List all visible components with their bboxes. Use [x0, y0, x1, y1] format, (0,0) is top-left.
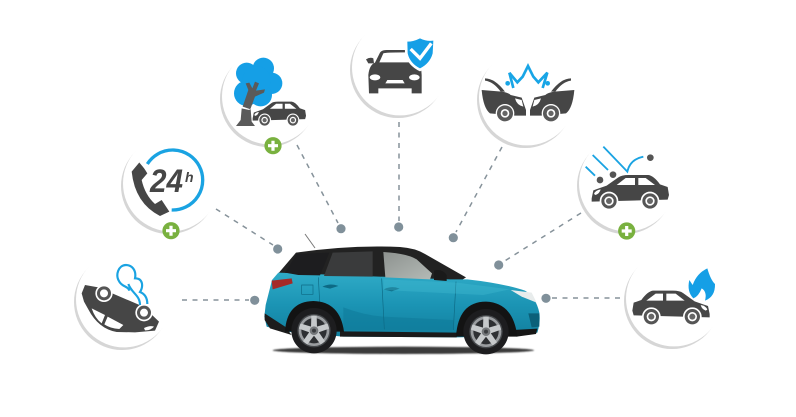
- icon: head-on collision: [482, 66, 574, 123]
- circle: [74, 251, 172, 350]
- car shadow: [273, 347, 534, 354]
- front bumper trim: [513, 329, 537, 337]
- fog lamp: [528, 313, 539, 327]
- headlight: [511, 290, 537, 303]
- plus badge: [162, 222, 180, 239]
- connector: overturned car: [182, 296, 259, 305]
- icon circle: protection: [350, 19, 448, 118]
- front wheel: [463, 309, 509, 354]
- circle: [477, 49, 575, 148]
- icon: tree falling on car: [234, 58, 306, 127]
- icon: car on fire: [632, 268, 715, 326]
- door seams and handles: [302, 277, 456, 330]
- icon circle: 24h assistance: [121, 135, 219, 239]
- plus badge: [618, 222, 635, 240]
- main teal SUV: [264, 234, 540, 354]
- circle: [577, 135, 675, 234]
- rear door window: [324, 251, 373, 277]
- circle: [350, 19, 448, 118]
- icon: overturned car with smoke: [82, 265, 159, 332]
- plus badge: [264, 137, 282, 154]
- icon circle: collision: [477, 49, 575, 148]
- car body: [264, 273, 540, 337]
- connector: fire: [541, 294, 622, 303]
- antenna: [305, 234, 315, 248]
- rear bumper trim: [265, 313, 292, 335]
- connector: protection: [394, 122, 403, 232]
- lower body shade: [343, 307, 453, 330]
- front door window: [383, 252, 432, 279]
- circle: [624, 250, 722, 349]
- rear quarter window: [285, 253, 329, 275]
- icon: car with shield: [366, 36, 436, 93]
- tail light: [272, 278, 293, 289]
- sill: [340, 331, 457, 337]
- circle: [220, 48, 318, 147]
- circle: [121, 135, 219, 234]
- icon circle: overturned car: [74, 251, 172, 350]
- connector: 24h assistance: [216, 209, 282, 254]
- connector: hail: [494, 213, 581, 270]
- rear wheel arch: [285, 301, 344, 332]
- icon circle: hail: [577, 135, 675, 240]
- label: 24 hours: 24: [149, 163, 183, 199]
- body highlight: [383, 279, 510, 295]
- label: h: h: [185, 169, 194, 185]
- connector: fallen tree: [297, 145, 346, 233]
- wing mirror: [434, 270, 447, 281]
- connector: collision: [449, 147, 502, 242]
- icon circle: fire: [624, 250, 722, 349]
- icon: hail on car: [586, 147, 669, 210]
- roof and glasshouse: [278, 246, 466, 283]
- front wheel arch: [456, 302, 517, 337]
- icon: 24h telephone: [132, 150, 203, 216]
- icon circle: fallen tree: [220, 48, 318, 154]
- rear wheel: [291, 308, 337, 353]
